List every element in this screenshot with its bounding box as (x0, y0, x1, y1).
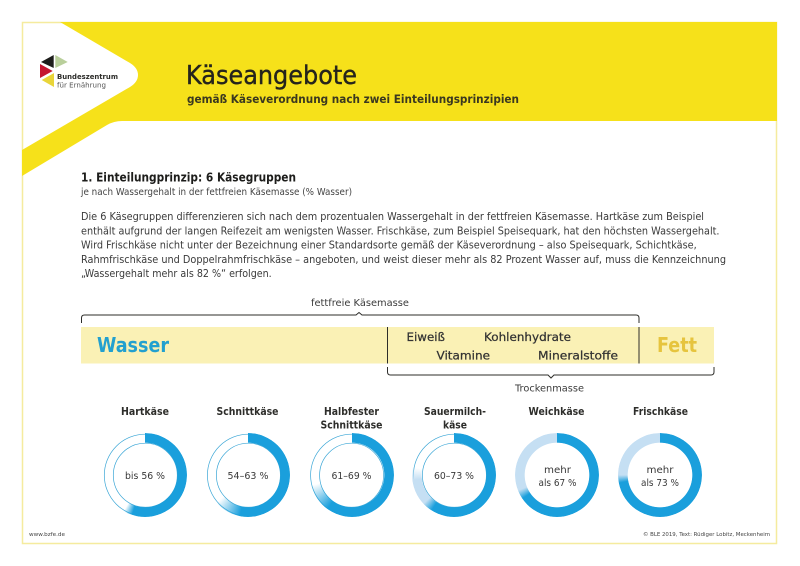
body paragraph: enthält aufgrund der langen Reifezeit am wenigsten Wasser. Frischkäse, zum Beispiel Speisequark, hat den höchsten Wassergehalt. (81, 226, 720, 237)
composition diagram (81, 298, 714, 394)
value: 60–73 % (434, 471, 474, 482)
ring chart (515, 433, 599, 517)
value: 54–63 % (228, 471, 268, 482)
cheese group: Schnittkäse (206, 407, 290, 517)
heading: Weichkäse (528, 407, 585, 418)
cheese group: Sauermilchkäse (412, 407, 496, 517)
body paragraph: Rahmfrischkäse und Doppelrahmfrischkäse – angeboten, und weist dieser mehr als 82 Prozent Wasser auf, muss die Kennzeichnung (81, 255, 726, 266)
title: Käseangebote (186, 61, 357, 91)
label: fettfreie Käsemasse: fettfreie Käsemasse (311, 298, 409, 309)
logo wordmark: für Ernährung (57, 80, 106, 90)
ring chart (103, 433, 187, 517)
body paragraph: Die 6 Käsegruppen differenzieren sich nach dem prozentualen Wassergehalt in der fettfreien Käsemasse. Hartkäse zum Beispiel (81, 212, 704, 223)
heading: Sauermilch- (424, 407, 486, 418)
logo mark: triangles (40, 55, 68, 87)
heading: Frischkäse (633, 407, 688, 418)
heading: Hartkäse (121, 407, 169, 418)
ring chart (618, 433, 702, 517)
value: 61–69 % (332, 471, 372, 482)
value: mehr (544, 465, 572, 476)
dry matter components: Kohlenhydrate (484, 330, 571, 344)
value: bis 56 % (125, 471, 165, 482)
ring chart (310, 433, 394, 517)
dry matter components: Vitamine (436, 348, 490, 362)
logo wordmark: Bundeszentrum (57, 72, 118, 81)
footer: website: www.bzfe.de (29, 532, 66, 538)
cheese group: Sauermilchkäse: käse (443, 420, 467, 432)
footer: copyright: © BLE 2019, Text: Rüdiger Lobitz, Meckenheim (643, 531, 770, 538)
value: mehr (646, 465, 674, 476)
cheese group: Frischkäse (618, 407, 702, 517)
cheese group: Weichkäse (515, 407, 599, 517)
bar (81, 327, 714, 364)
logo (40, 55, 118, 90)
cheese group: Hartkäse (103, 407, 187, 517)
section heading: 1. Einteilungprinzip: 6 Käsegruppen (81, 170, 296, 184)
logo wordmark (57, 72, 118, 90)
header banner (22, 22, 777, 176)
Fett label: Fett (657, 333, 697, 357)
subtitle: gemäß Käseverordnung nach zwei Einteilungsprinzipien (187, 92, 519, 106)
cheese group: Halbfester Schnittkäse: Schnittkäse (320, 420, 383, 432)
cheese group: Halbfester Schnittkäse (310, 407, 394, 517)
dry matter components: Mineralstoffe (538, 348, 618, 362)
value (641, 465, 679, 489)
section subheading: je nach Wassergehalt in der fettfreien Käsemasse (% Wasser) (80, 187, 352, 198)
ring chart (412, 433, 496, 517)
dry matter components: Eiweiß (406, 330, 445, 344)
label: Trockenmasse: Trockenmasse (514, 384, 584, 394)
value (538, 465, 576, 489)
body paragraph: „Wassergehalt mehr als 82 %“ erfolgen. (81, 269, 272, 280)
top bracket (82, 312, 639, 323)
bottom bracket (388, 367, 714, 378)
value: als 73 % (641, 478, 679, 489)
ring chart (206, 433, 290, 517)
Wasser label: Wasser (97, 333, 169, 357)
body paragraph: Wird Frischkäse nicht unter der Bezeichnung einer Standardsorte gemäß der Käseverordnung – also Speisequark, Schichtkäse, (81, 240, 697, 252)
value: als 67 % (538, 478, 576, 489)
dividers (388, 327, 639, 364)
dry matter components (406, 330, 618, 362)
heading: Schnittkäse (216, 407, 279, 418)
body paragraph (81, 212, 726, 280)
heading: Halbfester (324, 407, 379, 418)
